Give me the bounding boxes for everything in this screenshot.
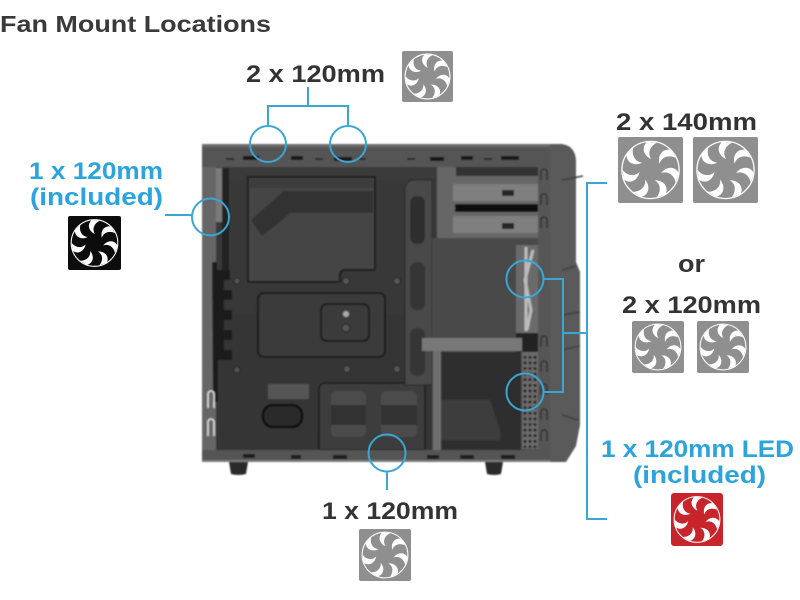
top label: 2 x 120mm xyxy=(246,61,385,88)
cable cutouts xyxy=(263,384,309,427)
LED label: (included) xyxy=(633,462,766,489)
computer case illustration xyxy=(202,144,583,475)
left mount circle and leader xyxy=(165,198,229,236)
drive bay area xyxy=(437,167,538,238)
or label: or xyxy=(678,251,705,278)
bottom label: 1 x 120mm xyxy=(322,498,458,525)
right label 2 x 120mm: 2 x 120mm xyxy=(622,292,761,319)
drive shelf xyxy=(422,338,522,450)
vertical plate with slots xyxy=(405,180,432,385)
front bracket xyxy=(587,183,607,519)
mesh panel xyxy=(522,352,538,449)
top rail xyxy=(202,144,550,167)
expansion slots xyxy=(212,168,232,402)
case front panel xyxy=(540,144,580,462)
standoffs xyxy=(234,278,400,373)
bottom fan icon xyxy=(359,529,411,581)
120mm fan icons xyxy=(632,321,749,373)
left rail clips xyxy=(208,391,214,436)
LED label: 1 x 120mm LED xyxy=(601,436,794,463)
140mm fan icons xyxy=(618,137,758,203)
left rail xyxy=(202,167,216,462)
upper motherboard cutout xyxy=(248,177,375,282)
case feet xyxy=(229,462,503,475)
right label 2 x 140mm: 2 x 140mm xyxy=(616,109,757,136)
LED label xyxy=(601,436,794,489)
left label: (included) xyxy=(30,184,163,211)
black fan icon xyxy=(68,216,121,270)
top mount circles xyxy=(250,126,366,162)
case body xyxy=(202,144,550,462)
right rail xyxy=(538,167,550,450)
top bracket xyxy=(268,87,348,126)
title: Fan Mount Locations xyxy=(0,11,271,37)
callout lines and circles xyxy=(165,87,607,519)
lower motherboard panel xyxy=(258,293,385,357)
top fan icon xyxy=(402,51,453,102)
bottom mount circle and leader xyxy=(368,434,406,490)
rear mount circles and connector xyxy=(506,260,587,410)
red fan icon xyxy=(671,493,723,546)
rear fan mount strip xyxy=(516,245,538,352)
bottom rail xyxy=(202,450,550,462)
left label xyxy=(29,158,163,211)
left label: 1 x 120mm xyxy=(29,158,163,185)
lower right compartment xyxy=(432,238,538,450)
bottom panel xyxy=(319,383,425,450)
